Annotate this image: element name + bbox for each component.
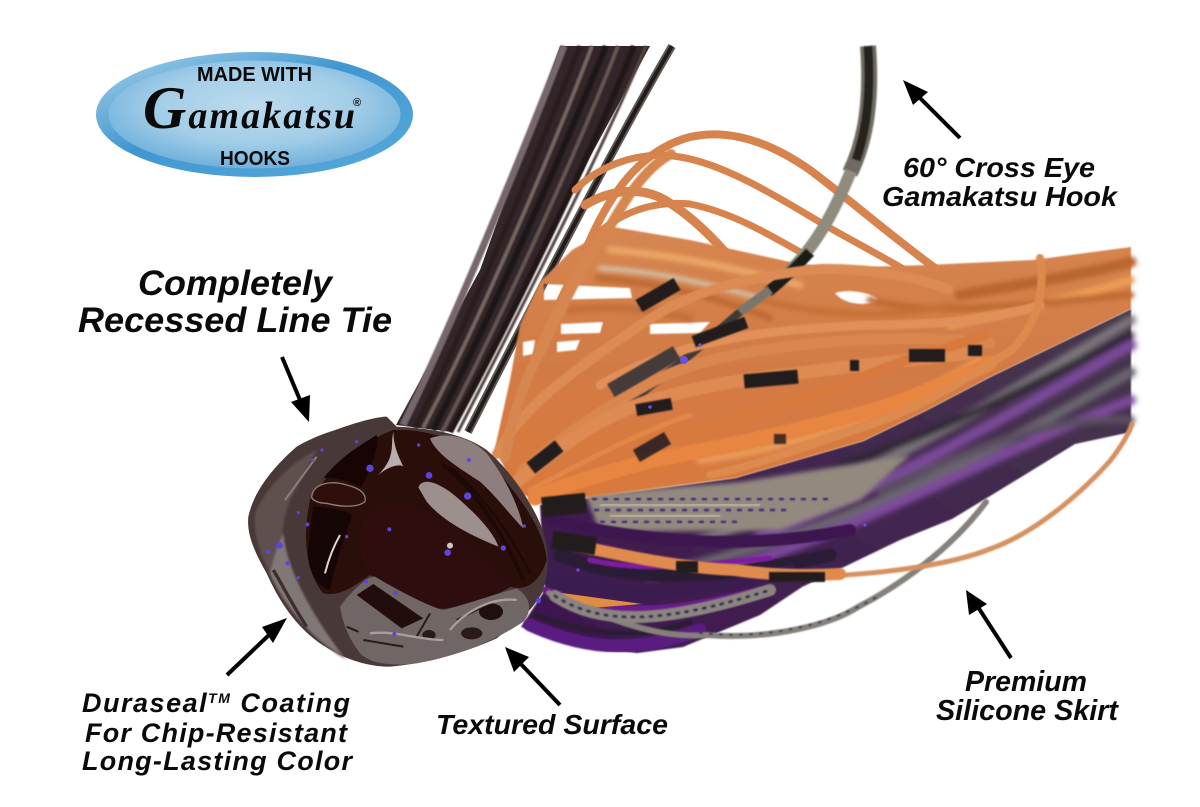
grey speckled strand bbox=[549, 502, 986, 636]
label: Premium Silicone Skirt: Silicone Skirt bbox=[936, 695, 1119, 727]
label: Premium Silicone Skirt bbox=[936, 666, 1119, 727]
label: 60 degree Cross Eye Gamakatsu Hook: Gamakatsu Hook bbox=[882, 181, 1118, 212]
skirt dark flakes bbox=[527, 278, 982, 582]
recessed line tie bbox=[323, 435, 377, 487]
front orange strands bbox=[497, 154, 1042, 498]
central dark dome bbox=[306, 430, 547, 609]
purple lower skirt mass bbox=[521, 309, 1131, 653]
label: Duraseal coating: TM bbox=[208, 690, 230, 706]
left lower grey band bbox=[270, 533, 343, 657]
label: Completely Recessed Line Tie: Completely bbox=[138, 264, 334, 303]
mass colour bands bbox=[570, 250, 1131, 460]
logo: Made with Gamakatsu Hooks badge bbox=[96, 52, 413, 177]
label: Premium Silicone Skirt: Premium bbox=[965, 666, 1087, 698]
logo: Made with Gamakatsu Hooks badge: ® bbox=[353, 97, 361, 109]
orange wedge under skirt bbox=[562, 593, 642, 608]
label: 60 degree Cross Eye Gamakatsu Hook: 60° Cross Eye bbox=[903, 152, 1095, 183]
head bbox=[248, 417, 548, 667]
seam lines bbox=[443, 465, 523, 580]
upper right gleam bbox=[430, 435, 523, 528]
arrow: to line tie bbox=[282, 357, 310, 422]
weed guard bristles bbox=[396, 46, 672, 432]
lower orange strand bbox=[565, 424, 1132, 577]
label: Duraseal coating bbox=[82, 688, 353, 776]
blurred grey and purple strands bbox=[650, 320, 1131, 575]
label: Duraseal coating: Coating bbox=[231, 688, 350, 718]
hook bbox=[610, 46, 869, 418]
logo: Made with Gamakatsu Hooks badge: Gamakatsu bbox=[143, 75, 355, 141]
label: Completely Recessed Line Tie: Recessed Line Tie bbox=[78, 301, 392, 340]
tan speckled band bbox=[585, 455, 910, 532]
label: Duraseal coating: Long-Lasting Color bbox=[82, 746, 353, 776]
left sheen bbox=[255, 450, 347, 660]
label: Duraseal coating: Duraseal bbox=[82, 688, 207, 718]
textured lower band bbox=[340, 577, 529, 665]
arrow: to hook bbox=[903, 80, 960, 138]
arrow: to coating bbox=[227, 618, 287, 675]
glitter on skirt bbox=[576, 343, 867, 572]
logo: Made with Gamakatsu Hooks badge: MADE WITH bbox=[197, 64, 312, 86]
arrow: to textured surface bbox=[505, 647, 560, 705]
orange skirt mass with holes bbox=[495, 227, 1131, 503]
arrow: to skirt bbox=[966, 590, 1011, 658]
label: 60 degree Cross Eye Gamakatsu Hook bbox=[882, 152, 1118, 212]
purple shiny strands near head bbox=[530, 520, 850, 646]
logo: Made with Gamakatsu Hooks badge: HOOKS bbox=[220, 148, 290, 170]
jig illustration bbox=[248, 46, 1132, 667]
label: Completely Recessed Line Tie bbox=[78, 264, 392, 340]
head base bbox=[248, 417, 548, 667]
upper orange strand arcs bbox=[506, 134, 935, 440]
purple glitter bbox=[266, 440, 541, 636]
label: Duraseal coating: For Chip-Resistant bbox=[85, 718, 348, 748]
label: Textured Surface: Textured Surface bbox=[436, 709, 668, 740]
